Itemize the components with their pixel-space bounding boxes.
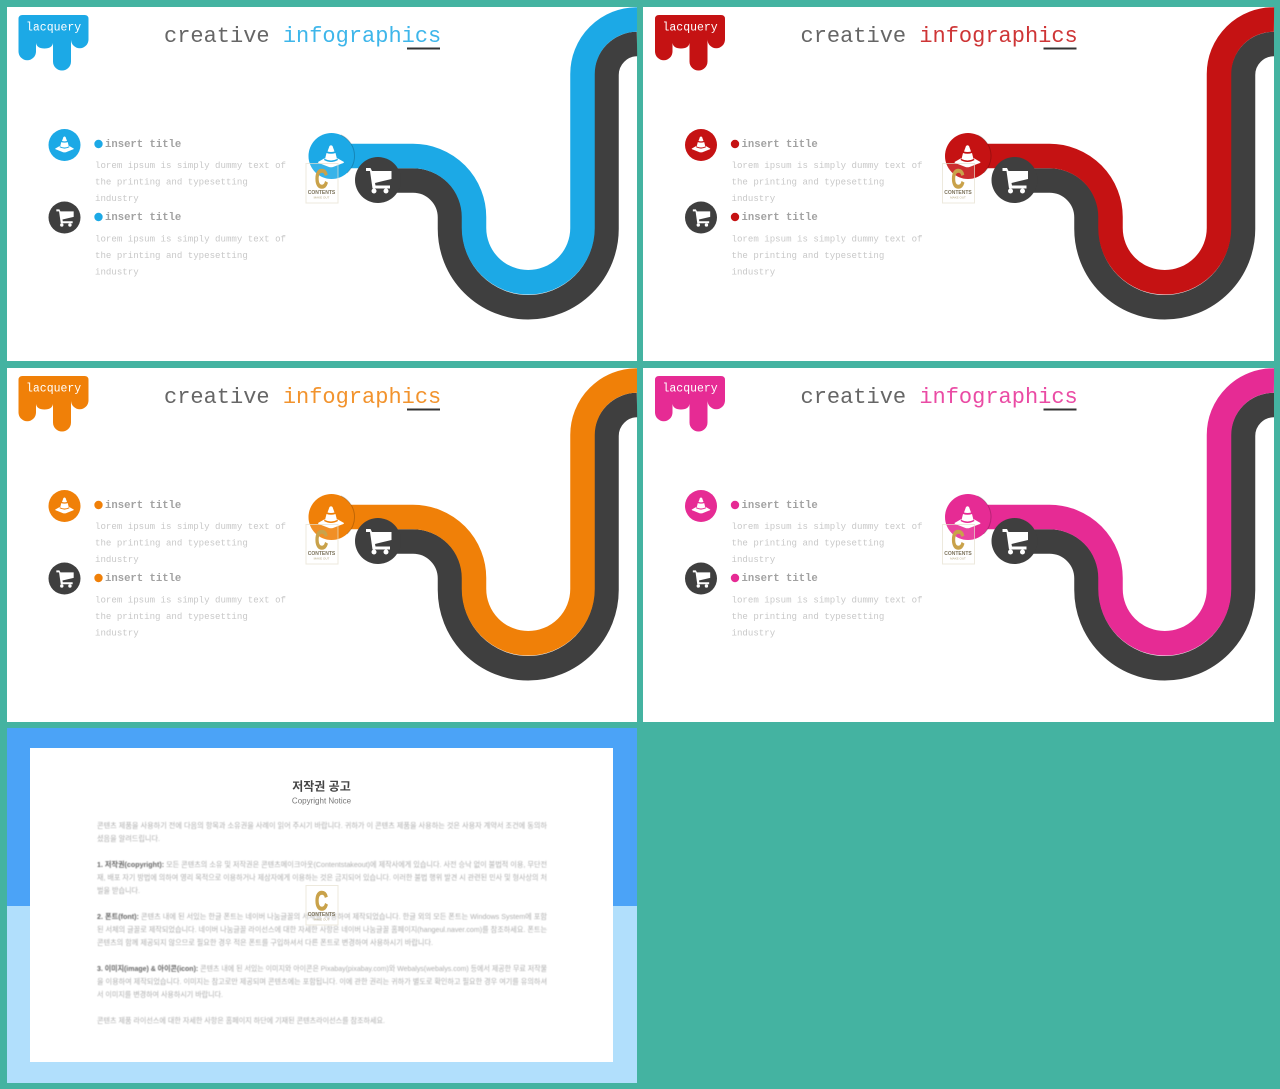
watermark badge: CONTENTS <box>308 190 336 196</box>
notice body text: 콘텐츠의 함께 제공되지 않으므로 필요한 경우 적은 폰트를 구입하셔서 다른 폰트로 변경하여 사용하시기 바랍니다. <box>97 938 433 947</box>
legend item: cone: insert title <box>742 139 818 151</box>
logo: lacquery drip badge: lacquery <box>662 22 718 34</box>
legend item: cart: the printing and typesetting <box>732 250 884 261</box>
legend item: cone: insert title <box>742 500 818 512</box>
road: coloured path <box>968 380 1274 643</box>
legend item: cart: the printing and typesetting <box>95 250 248 261</box>
watermark badge: C <box>952 525 964 555</box>
notice body text: 벌을 받습니다. <box>97 886 140 895</box>
watermark badge: C <box>315 525 328 555</box>
notice subheading: Copyright Notice <box>292 796 352 806</box>
legend item: cone: lorem ipsum is simply dummy text of <box>95 521 286 532</box>
watermark badge <box>306 524 338 564</box>
legend item: cone: the printing and typesetting <box>732 176 884 188</box>
icon: shopping cart node <box>355 518 401 564</box>
watermark badge: MAKE OUT <box>950 196 966 200</box>
road: coloured path <box>331 20 637 282</box>
legend item: cart <box>48 562 286 638</box>
legend item: cart: insert title <box>105 573 181 585</box>
legend item: cone <box>48 129 286 204</box>
icon: traffic cone node <box>945 133 991 179</box>
notice body text: 1. 저작권(copyright): 모든 콘텐츠의 소유 및 저작권은 콘텐츠메이크아웃(Contentstakeout)에 제작사에게 있습니다. 사전 승낙 없이 불법적 이용, 무단전 <box>97 860 547 869</box>
notice body text: 3. 이미지(image) & 아이콘(icon): 콘텐츠 내에 된 서있는 이미지와 아이콘은 Pixabay(pixabay.com)와 Webalys(webalys.com) 등에서 제공한 무료 저작물 <box>97 964 547 973</box>
panel: copyright notice <box>7 728 637 1083</box>
logo: lacquery drip badge <box>655 376 725 432</box>
legend item: cart: industry <box>732 628 776 638</box>
road: dark path <box>378 405 637 668</box>
notice body text: 재, 배포 자기 방법에 의하여 영리 목적으로 이용하거나 제삼자에게 이용하는 것은 금지되어 있습니다. 이러한 불법 행위 발견 시 관련된 민사 및 형사상의 처 <box>97 873 547 882</box>
legend item: cart <box>48 202 286 278</box>
panel background <box>7 7 637 361</box>
notice body text: 서 이미지를 변경하여 사용하시기 바랍니다. <box>97 990 223 999</box>
icon: traffic cone node <box>308 133 355 179</box>
title underline <box>407 408 440 410</box>
watermark badge: CONTENTS <box>944 190 972 196</box>
logo: lacquery drip badge: lacquery <box>662 382 718 396</box>
road: coloured path <box>331 380 637 643</box>
legend item: cart: industry <box>95 628 139 638</box>
notice body text: 셨음을 알려드립니다. <box>97 834 160 843</box>
notice body text <box>97 821 547 1025</box>
panel: red infographic <box>643 7 1274 361</box>
watermark badge: CONTENTS <box>308 551 336 557</box>
logo: lacquery drip badge <box>18 376 88 432</box>
title underline <box>407 48 440 50</box>
legend item: cone: industry <box>95 554 139 565</box>
legend item: cone: insert title <box>105 139 181 151</box>
title: creative infographics <box>800 385 1078 410</box>
watermark badge: MAKE OUT <box>950 556 966 560</box>
notice body text: 된 서체의 글꼴로 제작되었습니다. 네이버 나눔글꼴 라이선스에 대한 자세한 사항은 네이버 나눔글꼴 홈페이지(hangeul.naver.com)를 참조하세요. 폰트는 <box>97 925 547 934</box>
legend item: cone <box>48 490 286 565</box>
panel: blue infographic <box>7 7 637 361</box>
legend item: cart: lorem ipsum is simply dummy text of <box>732 234 922 244</box>
panel: pink infographic <box>643 368 1274 722</box>
notice heading: 저작권 공고 <box>292 778 351 794</box>
legend item: cone: lorem ipsum is simply dummy text of <box>732 521 922 532</box>
road: dark path <box>1014 405 1274 668</box>
logo: lacquery drip badge: lacquery <box>26 22 81 34</box>
legend item: cone: lorem ipsum is simply dummy text of <box>732 160 922 171</box>
panel background <box>643 7 1274 361</box>
legend item: cone: lorem ipsum is simply dummy text of <box>95 160 286 171</box>
notice white card <box>30 748 613 1062</box>
watermark badge <box>942 164 974 203</box>
watermark badge: MAKE OUT <box>314 556 329 560</box>
watermark badge: C <box>952 164 964 194</box>
watermark badge: CONTENTS <box>944 551 972 557</box>
title: creative infographics <box>164 24 441 49</box>
legend item: cart: insert title <box>742 573 818 585</box>
legend item: cone: the printing and typesetting <box>732 538 884 548</box>
icon: shopping cart node <box>992 157 1038 203</box>
notice body text: 을 이용하여 제작되었습니다. 이미지는 참고로만 제공되며 콘텐츠에는 포함됩니다. 이에 관한 권리는 귀하가 별도로 확인하고 필요한 경우 여기를 유의하셔 <box>97 977 547 986</box>
icon: traffic cone node <box>308 494 355 540</box>
title underline <box>1044 408 1076 410</box>
notice body text: 콘텐츠 제품을 사용하기 전에 다음의 항목과 소유권을 사례이 읽어 주시기 바랍니다. 귀하가 이 콘텐츠 제품을 사용하는 것은 사용자 계약서 조건에 동의하 <box>97 821 547 830</box>
road: coloured path <box>968 19 1274 282</box>
notice background upper band <box>7 728 637 906</box>
watermark badge: C <box>315 164 328 194</box>
legend item: cart: insert title <box>105 212 181 224</box>
legend item: cart: the printing and typesetting <box>95 611 248 622</box>
icon: shopping cart node <box>355 157 401 203</box>
road: dark path <box>1014 44 1274 307</box>
legend item: cart: industry <box>732 266 776 278</box>
legend item: cart: lorem ipsum is simply dummy text of <box>95 234 286 244</box>
legend item: cone <box>685 490 922 565</box>
notice body text: 콘텐츠 제품 라이선스에 대한 자세한 사항은 홈페이지 하단에 기재된 콘텐츠라이선스를 참조하세요. <box>97 1016 385 1025</box>
legend item: cone: industry <box>732 554 776 565</box>
watermark badge <box>942 524 974 564</box>
watermark badge <box>306 164 338 203</box>
logo: lacquery drip badge <box>18 15 88 70</box>
panel background <box>643 368 1274 722</box>
legend item: cart <box>685 202 922 278</box>
watermark badge: MAKE OUT <box>314 918 329 922</box>
legend item: cone: industry <box>732 193 776 204</box>
notice background lower band <box>7 906 637 1083</box>
watermark badge: MAKE OUT <box>314 196 329 200</box>
watermark badge: CONTENTS <box>308 912 336 918</box>
logo: lacquery drip badge <box>655 15 725 70</box>
logo: lacquery drip badge: lacquery <box>26 382 81 396</box>
legend item: cone <box>685 129 922 204</box>
legend item: cone: the printing and typesetting <box>95 176 248 188</box>
notice body text: 2. 폰트(font): 콘텐츠 내에 된 서있는 한글 폰트는 네이버 나눔글꼴의 서체를 사용하여 제작되었습니다. 한글 외의 모든 폰트는 Windows System에 포함 <box>97 912 547 921</box>
legend item: cone: the printing and typesetting <box>95 538 248 548</box>
legend item: cone: industry <box>95 193 139 204</box>
title: creative infographics <box>164 385 441 410</box>
watermark badge <box>306 886 338 925</box>
legend item: cart: insert title <box>742 212 818 224</box>
legend item: cart: lorem ipsum is simply dummy text of <box>732 594 922 606</box>
icon: shopping cart node <box>992 518 1038 564</box>
panel background <box>7 368 637 722</box>
panel: orange infographic <box>7 368 637 722</box>
legend item: cart: the printing and typesetting <box>732 611 884 622</box>
title underline <box>1044 48 1076 50</box>
road: dark path <box>378 44 637 307</box>
icon: traffic cone node <box>945 494 991 540</box>
legend item: cart <box>685 562 922 638</box>
legend item: cart: industry <box>95 266 139 278</box>
title: creative infographics <box>800 24 1078 49</box>
watermark badge: C <box>315 886 328 916</box>
legend item: cart: lorem ipsum is simply dummy text of <box>95 594 286 606</box>
legend item: cone: insert title <box>105 500 181 512</box>
